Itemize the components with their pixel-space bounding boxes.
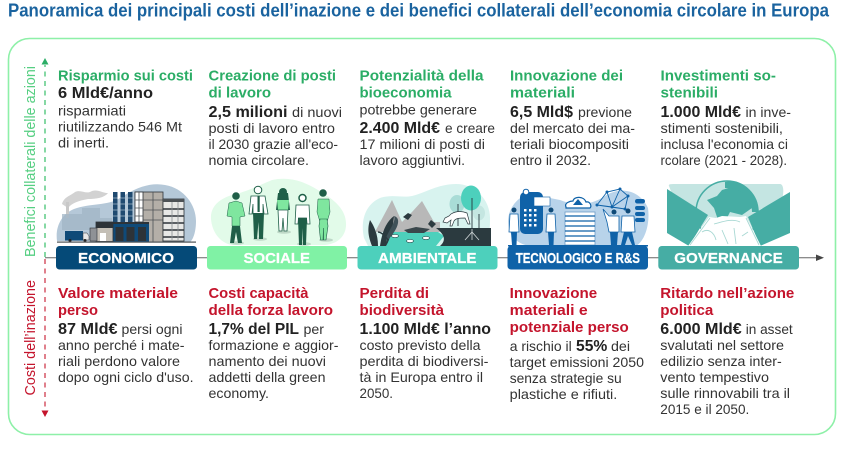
- vertical axis: costs arrow: [42, 259, 48, 417]
- description: target emissioni 2050: [510, 354, 644, 370]
- heading: bioeconomia: [360, 84, 452, 102]
- vertical axis: benefits arrow: [42, 58, 48, 257]
- description: inclusa l'economia ci: [660, 136, 788, 152]
- column 4 cost: [510, 285, 644, 402]
- heading: di lavoro: [208, 84, 271, 102]
- description: il 2030 grazie all'eco-: [208, 136, 338, 152]
- heading: [360, 285, 445, 319]
- pill: Tecnologico e R&S: TECNOLOGICO E R&S: [516, 250, 640, 267]
- axis label: costs: Costi dell’inazione: [23, 280, 39, 396]
- heading: Costi capacità: [208, 285, 309, 302]
- heading: Innovazione dei: [510, 68, 623, 84]
- heading: [360, 68, 484, 102]
- heading: Potenzialità della: [360, 68, 484, 84]
- description: per: [304, 321, 324, 337]
- description: 55%: [576, 338, 607, 355]
- heading: Perdita di: [360, 285, 429, 302]
- description: [660, 104, 791, 168]
- description: [510, 338, 644, 402]
- axis label: benefits: Benefici collaterali delle azioni: [23, 66, 39, 257]
- heading: [208, 68, 336, 102]
- description: 6,5 Mld$: [510, 104, 573, 121]
- description: [208, 321, 339, 401]
- heading: [660, 68, 776, 102]
- description: [58, 102, 182, 150]
- column 3 benefit: [360, 68, 495, 168]
- heading: [58, 285, 178, 319]
- heading: Innovazione: [510, 285, 597, 302]
- pill: Sociale: SOCIALE: [244, 250, 310, 267]
- description: tà in Europa entro il: [360, 369, 483, 385]
- heading: della forza lavoro: [208, 302, 333, 319]
- pill: Ambientale: [358, 246, 498, 270]
- description: riali perdono valore: [58, 353, 180, 369]
- description: 1.000 Mld€: [660, 104, 741, 121]
- icon: nature landscape: [363, 184, 491, 246]
- heading: Investimenti so-: [660, 68, 776, 84]
- description: rcolare (2021 - 2028).: [660, 152, 787, 168]
- description: addetti della green: [208, 369, 326, 385]
- description: costo previsto della: [360, 337, 481, 353]
- description: in asset: [746, 321, 793, 337]
- heading: Risparmio sui costi: [58, 68, 193, 84]
- description: svalutati nel settore: [660, 337, 784, 353]
- description: sulle rinnovabili tra il: [660, 385, 790, 401]
- pill: Economico: ECONOMICO: [78, 250, 174, 267]
- heading: materiali e: [510, 302, 588, 319]
- description: di nuovi: [292, 104, 342, 120]
- description: posti di lavoro entro: [208, 120, 335, 136]
- pill: Tecnologico e R&S: [508, 246, 648, 270]
- description: [58, 321, 194, 385]
- description: lavoro aggiuntivi.: [360, 152, 465, 168]
- description: stimenti sostenibili,: [660, 120, 783, 136]
- heading: perso: [58, 302, 98, 319]
- description: 1,7% del PIL: [208, 321, 299, 338]
- figure: 6 Mld€/anno: [58, 85, 153, 102]
- description: senza strategie su: [510, 370, 622, 386]
- pill: Governance: GOVERNANCE: [674, 250, 783, 267]
- pill: Economico: [56, 246, 197, 270]
- description: in inve-: [746, 104, 791, 120]
- column 1 benefit: [58, 68, 193, 150]
- icon: people: [211, 179, 346, 246]
- icon: factory: [57, 184, 196, 243]
- column 5 cost: [660, 285, 794, 417]
- description: [660, 321, 793, 417]
- timeline arrow: [45, 254, 824, 261]
- pill: Governance: [658, 246, 799, 270]
- heading: stenibili: [660, 84, 718, 102]
- heading: [208, 285, 333, 319]
- description: di inerti.: [58, 134, 109, 150]
- column 4 benefit: [510, 68, 635, 168]
- description: [208, 104, 342, 168]
- column 5 benefit: [660, 68, 791, 168]
- heading: Valore materiale: [58, 285, 178, 302]
- description: nomia circolare.: [208, 152, 309, 168]
- description: entro il 2032.: [510, 152, 591, 168]
- heading: Ritardo nell’azione: [660, 285, 794, 302]
- icon: technology: [508, 188, 648, 246]
- description: 17 milioni di posti di: [360, 136, 485, 152]
- heading: [510, 68, 623, 102]
- description: risparmiati: [58, 102, 126, 118]
- description: 6.000 Mld€: [660, 321, 742, 338]
- description: a rischio il: [510, 338, 572, 354]
- heading: [510, 285, 629, 336]
- description: potrebbe generare: [360, 102, 477, 118]
- description: 2.400 Mld€: [360, 120, 440, 137]
- description: 1.100 Mld€ l’anno: [360, 321, 491, 338]
- column 3 cost: [360, 285, 491, 401]
- description: previone: [578, 104, 632, 120]
- description: e creare: [445, 120, 495, 136]
- description: [360, 321, 491, 401]
- description: persi ogni: [122, 321, 182, 337]
- heading: politica: [660, 302, 714, 319]
- description: dopo ogni ciclo d'uso.: [58, 369, 194, 385]
- column 2 cost: [208, 285, 339, 401]
- description: economy.: [208, 385, 269, 401]
- pill: Ambientale: AMBIENTALE: [378, 250, 476, 267]
- description: dei: [611, 338, 630, 354]
- description: [360, 102, 495, 168]
- description: 2,5 milioni: [208, 104, 288, 121]
- description: 2050.: [360, 385, 393, 401]
- icon: globe and handshake: [667, 181, 790, 246]
- column 2 benefit: [208, 68, 342, 168]
- description: vento tempestivo: [660, 369, 769, 385]
- column 1 cost: [58, 285, 194, 385]
- heading: Creazione di posti: [208, 68, 336, 84]
- description: riutilizzando 546 Mt: [58, 118, 182, 134]
- description: plastiche e rifiuti.: [510, 386, 617, 402]
- description: edilizio senza inter-: [660, 353, 782, 369]
- description: del mercato dei ma-: [510, 120, 635, 136]
- description: 2015 e il 2050.: [660, 401, 749, 417]
- description: teriali biocompositi: [510, 136, 629, 152]
- description: formazione e aggior-: [208, 337, 339, 353]
- heading: potenziale perso: [510, 319, 629, 336]
- pill: Sociale: [207, 246, 347, 270]
- description: anno perché i mate-: [58, 337, 185, 353]
- heading: materiali: [510, 84, 575, 102]
- description: perdita di biodiversi-: [360, 353, 489, 369]
- description: [510, 104, 635, 168]
- description: namento dei nuovi: [208, 353, 326, 369]
- heading: biodiversità: [360, 302, 445, 319]
- heading: [660, 285, 794, 319]
- description: 87 Mld€: [58, 321, 118, 338]
